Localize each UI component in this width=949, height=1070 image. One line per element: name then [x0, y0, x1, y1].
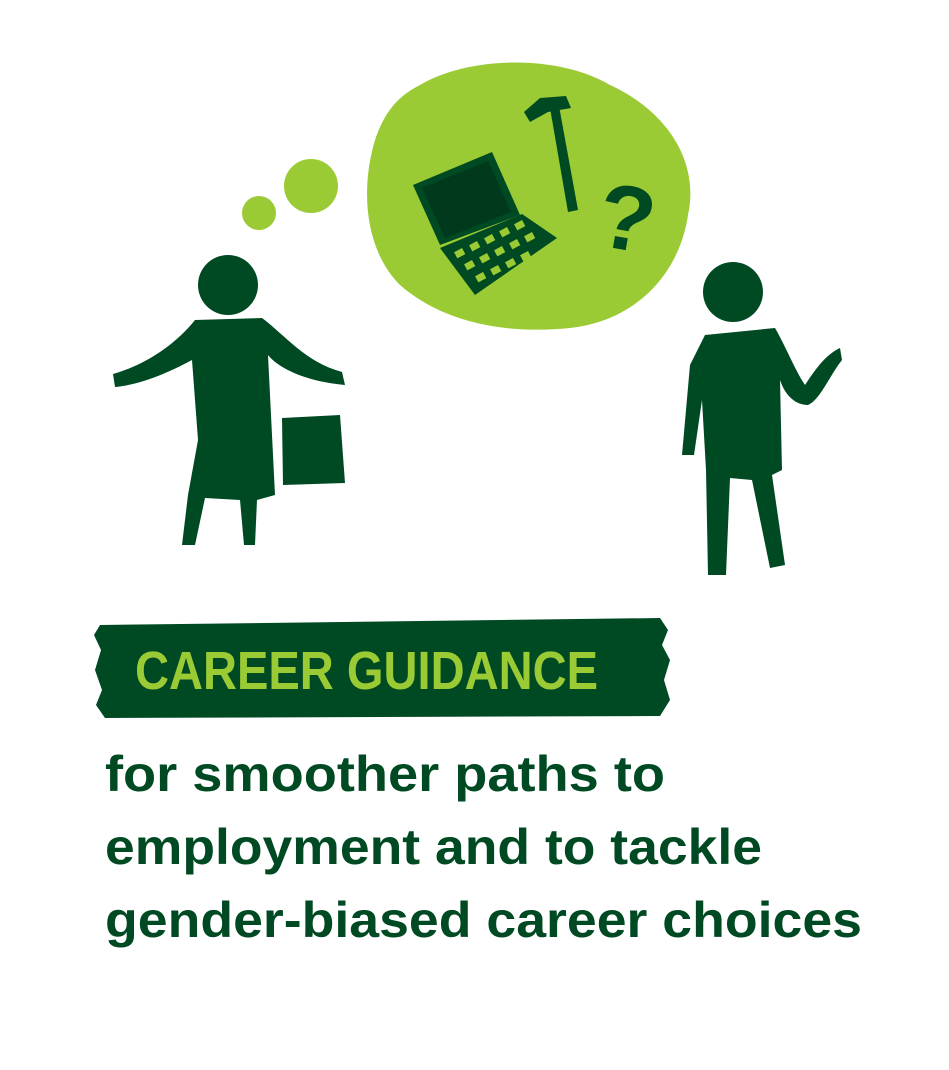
- figure: woman with bag: [113, 255, 345, 545]
- thought bubble large: [367, 62, 690, 330]
- subtitle: employment and to tackle: [105, 819, 762, 875]
- icon: question mark: ?: [590, 164, 663, 274]
- thought bubble medium: [284, 159, 338, 213]
- icon: hammer: [524, 96, 578, 212]
- subtitle: gender-biased career choices: [105, 892, 862, 948]
- banner title: CAREER GUIDANCE: [135, 641, 598, 701]
- subtitle: for smoother paths to: [105, 746, 665, 802]
- banner: career guidance: [94, 618, 670, 718]
- subtitle: [105, 746, 862, 948]
- icon: laptop: [413, 152, 557, 295]
- thought bubble small: [242, 196, 276, 230]
- figure: man: [682, 262, 842, 575]
